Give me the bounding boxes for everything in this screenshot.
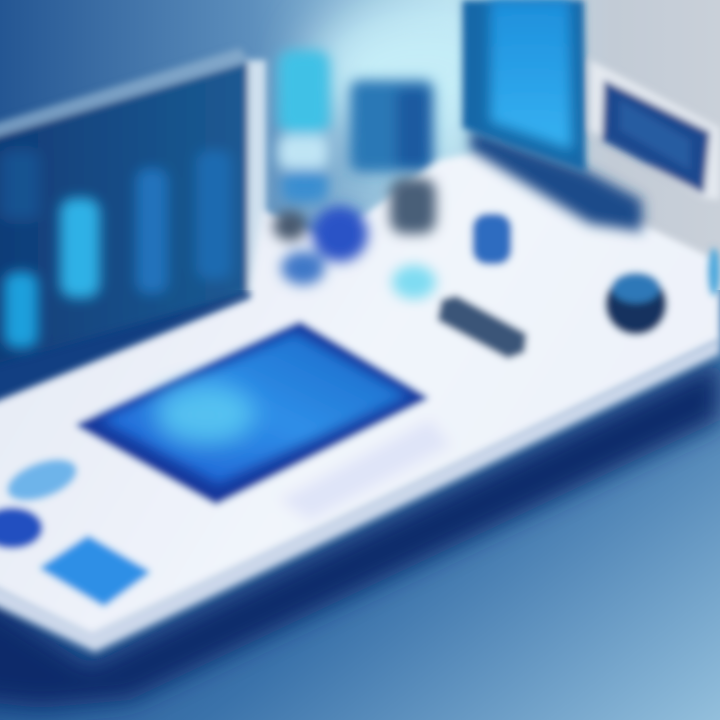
- panel: centre icons over platform: [273, 178, 436, 285]
- platform: pale front lip: [0, 338, 720, 652]
- monitor base shadow: [470, 128, 642, 232]
- bar chart: glowing columns: [0, 150, 232, 348]
- glow: light cyan behind centre: [310, 0, 530, 140]
- platform: white tilted surface: [0, 150, 720, 640]
- icon: bright blue square tile: [40, 536, 150, 606]
- icon: blue rounded cube: [473, 214, 511, 264]
- wall top edge highlight: [0, 48, 250, 142]
- panel: left bar chart wall: [0, 48, 266, 368]
- tablet screen: [100, 332, 410, 484]
- background: lower floor gradient: [0, 290, 720, 720]
- monitor screen: [490, 0, 572, 150]
- tablet glare: [155, 385, 255, 445]
- icon: dark blue tile: [0, 508, 42, 548]
- panel: upright monitor: [462, 0, 642, 232]
- icon: cyan edge disc: [708, 248, 720, 296]
- icon: light blue oval tile: [2, 452, 82, 508]
- icon: cyan glowing dot: [392, 265, 436, 299]
- icon: dark round knob: [606, 273, 666, 334]
- panel: right small monitor: [590, 60, 720, 200]
- platform: pale glow under tablet: [280, 420, 450, 520]
- panel: centre floating tiles: [278, 50, 434, 202]
- icon: dark pill button: [438, 296, 526, 358]
- monitor frame: [462, 0, 586, 172]
- right edge highlight of wall: [248, 60, 266, 292]
- tablet shadow: [76, 322, 428, 504]
- panel: large blue tablet: [76, 322, 428, 504]
- platform: shadow edge: [0, 360, 720, 708]
